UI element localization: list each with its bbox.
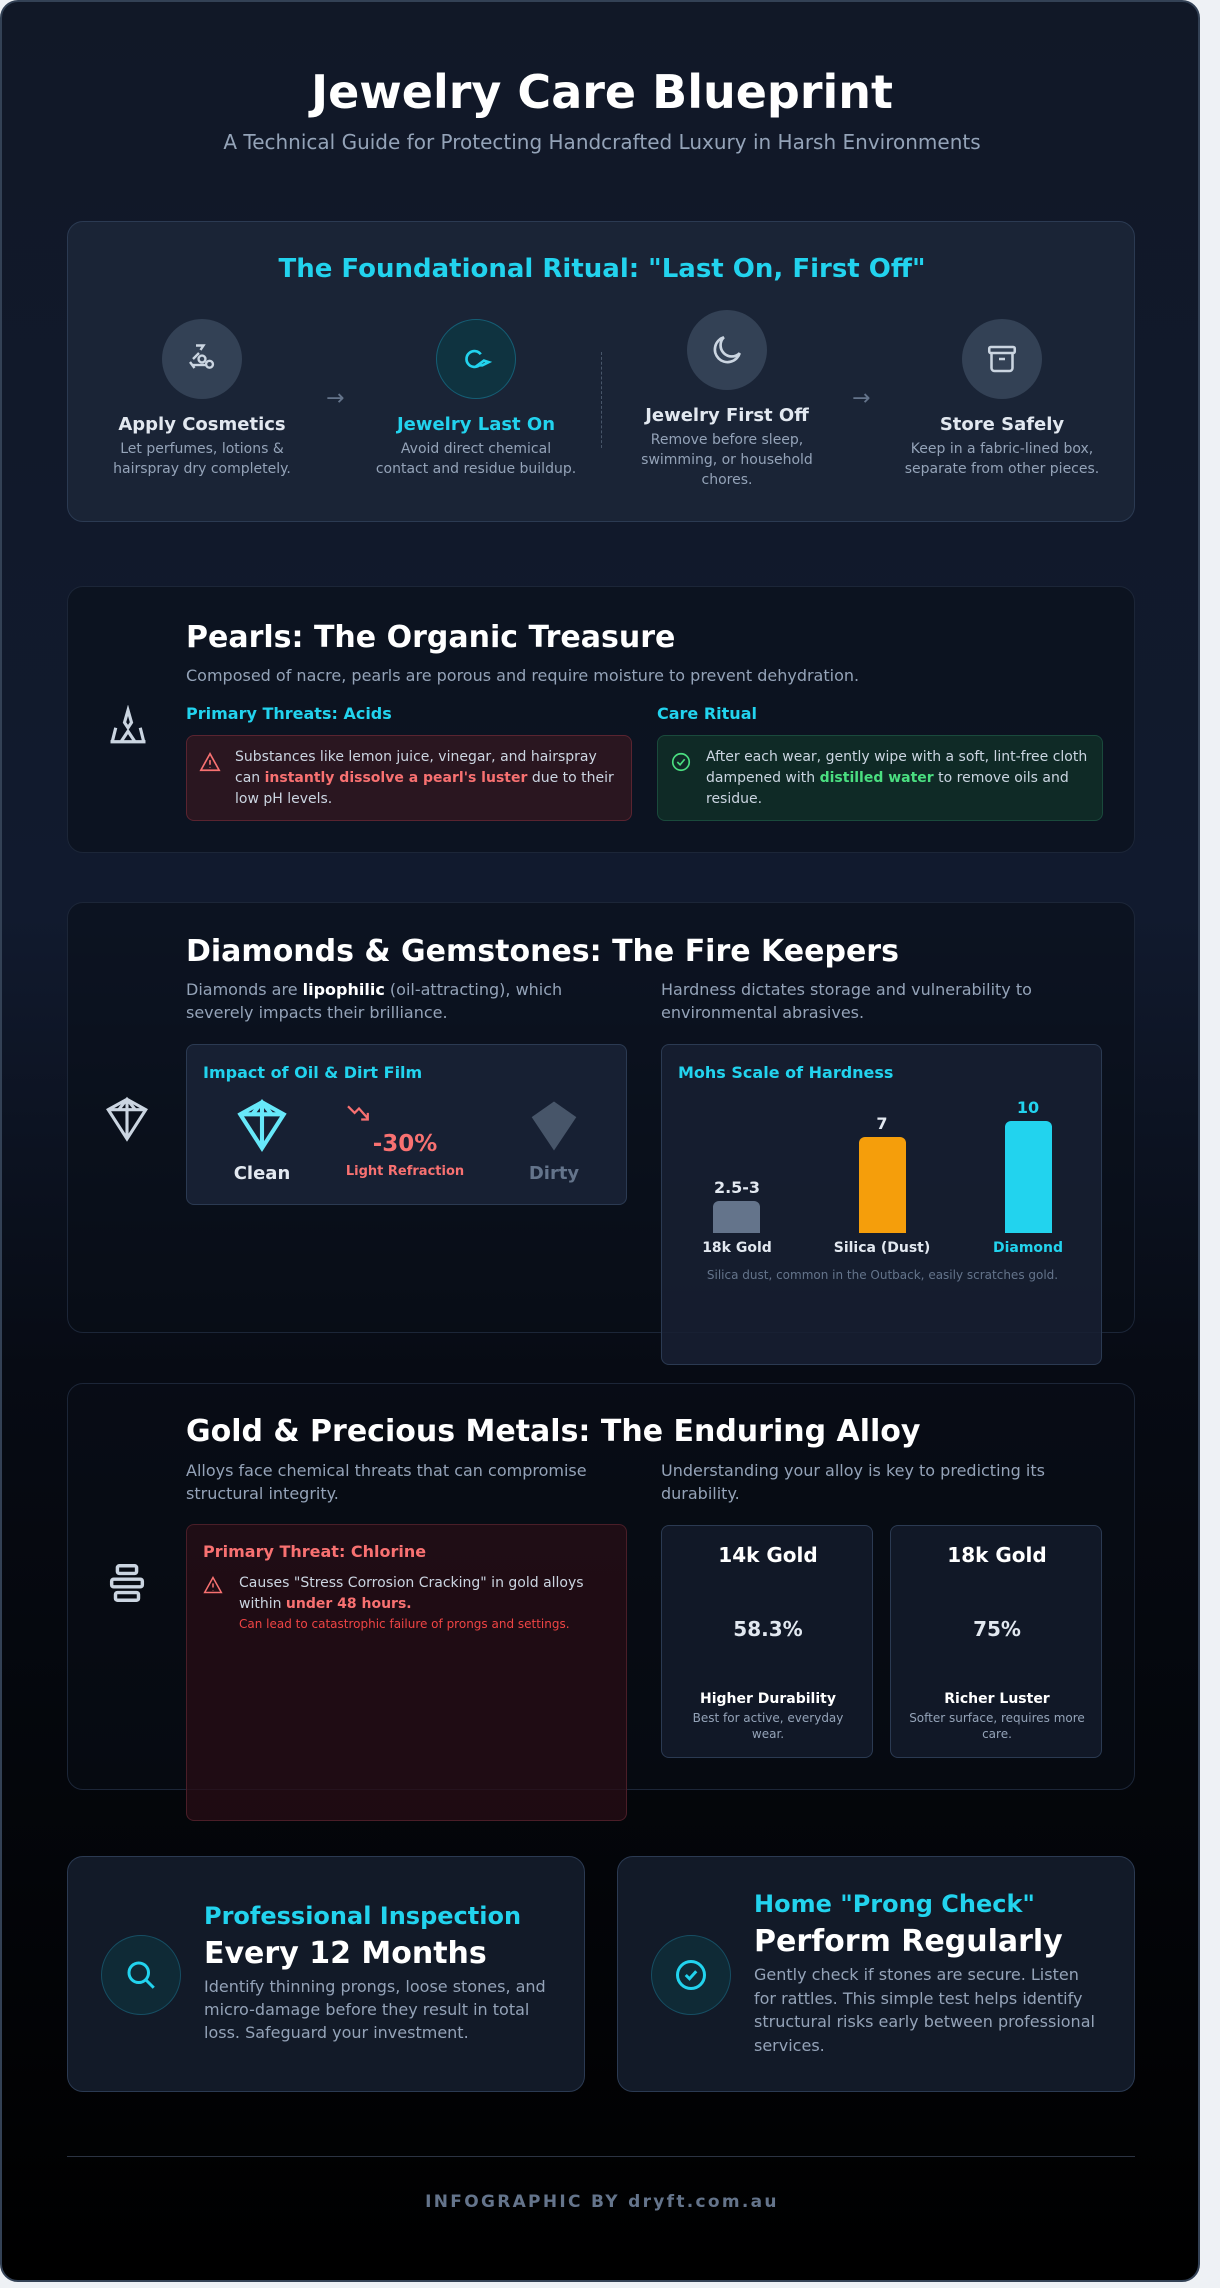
- icon: ring: [436, 319, 516, 399]
- chart: mohs hardness: Silica dust, common in the Outback, easily scratches gold.: [707, 1268, 1058, 1282]
- callout: care: [657, 735, 1103, 821]
- step: store safely: Keep in a fabric-lined box,: [911, 441, 1093, 457]
- chart: mohs hardness: 2.5-3: [714, 1178, 760, 1197]
- panel: diamonds: Hardness dictates storage and vulnerability to environmental abrasives.: [661, 980, 1032, 1022]
- panel: prong check: [617, 1856, 1135, 2092]
- chart: oil & dirt impact: Light Refraction: [346, 1164, 464, 1179]
- step: jewelry first off: Remove before sleep,: [651, 432, 803, 448]
- panel: diamonds: Diamonds are lipophilic (oil-attracting), which severely impacts their brilliance.: [186, 980, 562, 1022]
- panel: prong check: Perform Regularly: [754, 1924, 1063, 1959]
- step: apply cosmetics: Let perfumes, lotions &: [120, 441, 284, 457]
- alloy card 18k: Softer surface, requires more care.: [909, 1711, 1085, 1741]
- footer: INFOGRAPHIC BY dryft.com.au: [425, 2192, 779, 2212]
- chart: mohs hardness: Mohs Scale of Hardness: [678, 1063, 893, 1082]
- step: apply cosmetics: hairspray dry completely.: [113, 461, 291, 477]
- step: jewelry first off: swimming, or household: [641, 452, 813, 468]
- icon: pearl: [110, 705, 146, 744]
- icon: cosmetics: [162, 319, 242, 399]
- panel: prong check: Gently check if stones are secure. Listen for rattles. This simple test helps identify structural risks early between professional services.: [754, 1965, 1095, 2054]
- step: jewelry last on: [376, 319, 576, 477]
- icon: clean diamond: [237, 1099, 287, 1152]
- chart: oil & dirt impact: Dirty: [529, 1163, 579, 1184]
- alloy card 18k: Richer Luster: [944, 1691, 1050, 1707]
- step: apply cosmetics: [113, 319, 291, 477]
- panel: foundational ritual: [67, 221, 1135, 522]
- alloy card 18k: [890, 1525, 1102, 1758]
- chart: mohs hardness: 7: [876, 1114, 888, 1133]
- icon: diamond: [106, 1096, 148, 1142]
- chart: mohs hardness: Diamond: [993, 1240, 1063, 1256]
- step: jewelry first off: Jewelry First Off: [645, 405, 809, 426]
- alloy card 14k: [661, 1525, 873, 1758]
- title: Jewelry Care Blueprint: [311, 65, 893, 119]
- icon: magnifier: [101, 1935, 181, 2015]
- chart: mohs hardness: 18k Gold: [702, 1240, 772, 1256]
- icon: moon: [687, 310, 767, 390]
- panel: professional inspection: Every 12 Months: [204, 1936, 487, 1971]
- panel: professional inspection: Identify thinning prongs, loose stones, and micro-damage before they result in total loss. Safeguard your investment.: [204, 1977, 546, 2042]
- chart: mohs hardness: [661, 1044, 1102, 1365]
- callout: chlorine threat: Primary Threat: Chlorine: [203, 1542, 426, 1561]
- callout: acids: Substances like lemon juice, vinegar, and hairspray can instantly dissolve a pearl's luster due to their low pH levels.: [235, 749, 614, 807]
- panel: pearls: Composed of nacre, pearls are porous and require moisture to prevent dehydration.: [186, 666, 859, 685]
- icon: check: [651, 1935, 731, 2015]
- panel: gold: Alloys face chemical threats that can compromise structural integrity.: [186, 1461, 587, 1503]
- arrow: →: [852, 386, 870, 411]
- arrow: →: [326, 386, 344, 411]
- chart: oil & dirt impact: [186, 1044, 627, 1205]
- pearls title: Pearls: The Organic Treasure: [186, 620, 675, 655]
- panel: professional inspection: [67, 1856, 585, 2092]
- panel: gold: Understanding your alloy is key to predicting its durability.: [661, 1461, 1045, 1503]
- callout: chlorine threat: Can lead to catastrophic failure of prongs and settings.: [239, 1617, 570, 1631]
- alloy card 14k: Higher Durability: [700, 1691, 836, 1707]
- icon: gold bars: [110, 1564, 144, 1602]
- callout: care: After each wear, gently wipe with a soft, lint-free cloth dampened with distilled water to remove oils and residue.: [706, 749, 1087, 807]
- step: store safely: [905, 319, 1099, 477]
- panel: diamonds: [67, 902, 1135, 1333]
- step: store safely: Store Safely: [940, 414, 1064, 435]
- alloy card 14k: Best for active, everyday wear.: [693, 1711, 843, 1741]
- subtitle: A Technical Guide for Protecting Handcrafted Luxury in Harsh Environments: [223, 130, 981, 154]
- diamonds title: Diamonds & Gemstones: The Fire Keepers: [186, 934, 899, 969]
- chart: oil & dirt impact: Clean: [234, 1163, 290, 1184]
- ritual heading: The Foundational Ritual: "Last On, First Off": [278, 254, 926, 284]
- step: jewelry first off: [641, 310, 813, 488]
- callout: acids: [186, 735, 632, 821]
- step: store safely: separate from other pieces.: [905, 461, 1099, 477]
- panel: professional inspection: Professional Inspection: [204, 1902, 521, 1930]
- step: jewelry first off: chores.: [702, 472, 752, 488]
- panel: gold: [67, 1383, 1135, 1790]
- callout: chlorine threat: Causes "Stress Corrosion Cracking" in gold alloys within under 48 hours.: [239, 1575, 584, 1612]
- chart: oil & dirt impact: -30%: [373, 1131, 437, 1157]
- callout: chlorine threat: [186, 1524, 627, 1821]
- step: apply cosmetics: Apply Cosmetics: [118, 414, 286, 435]
- chart: mohs hardness: 10: [1017, 1098, 1039, 1117]
- alloy card 18k: 18k Gold: [947, 1543, 1047, 1567]
- alloy card 14k: 58.3%: [733, 1617, 803, 1641]
- step: jewelry last on: Avoid direct chemical: [401, 441, 551, 457]
- panel: pearls: [67, 586, 1135, 853]
- step: jewelry last on: Jewelry Last On: [397, 414, 555, 435]
- gold title: Gold & Precious Metals: The Enduring Alloy: [186, 1414, 920, 1449]
- icon: box: [962, 319, 1042, 399]
- chart: oil & dirt impact: Impact of Oil & Dirt Film: [203, 1063, 422, 1082]
- step: jewelry last on: contact and residue buildup.: [376, 461, 576, 477]
- alloy card 14k: 14k Gold: [718, 1543, 818, 1567]
- alloy card 18k: 75%: [973, 1617, 1021, 1641]
- chart: mohs hardness: Silica (Dust): [834, 1240, 930, 1256]
- label: care: Care Ritual: [657, 704, 757, 723]
- icon: dirty diamond: [532, 1102, 576, 1150]
- panel: prong check: Home "Prong Check": [754, 1890, 1035, 1918]
- label: threats: Primary Threats: Acids: [186, 704, 392, 723]
